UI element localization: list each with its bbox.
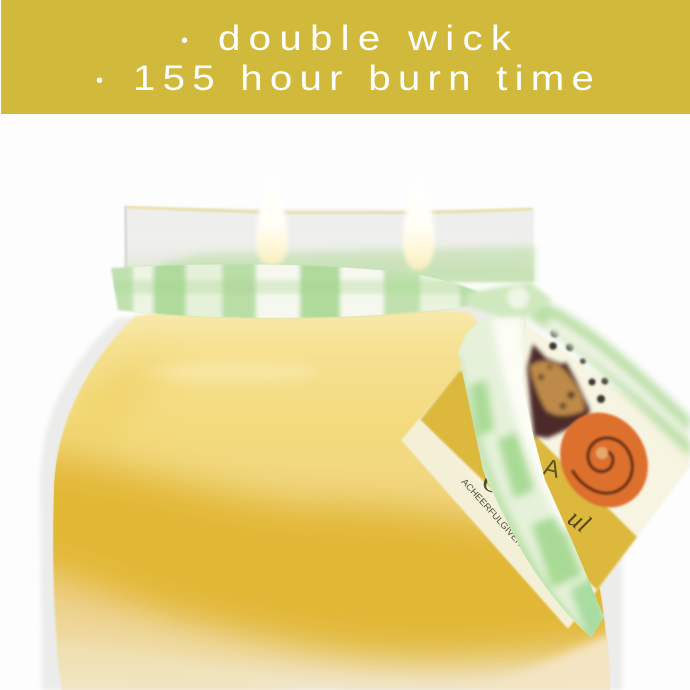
muffin illustration: [527, 344, 590, 438]
jar neck glass: [124, 208, 534, 282]
gingham ribbon: [110, 264, 552, 319]
banner: [1, 0, 690, 114]
jar rim line: [125, 207, 533, 213]
pale highlight band: [140, 362, 320, 382]
dark mustard band: [20, 452, 640, 658]
tag mustard panel: [420, 370, 637, 590]
tag cream strip: [402, 420, 590, 628]
neck right edge: [532, 209, 534, 268]
flame right: [403, 174, 435, 270]
neck left edge: [125, 206, 127, 268]
pale bottom wash: [58, 644, 280, 690]
tag green ribbon right tail: [528, 298, 690, 457]
jar glass body: [40, 300, 622, 690]
banner line two: 155 hour burn time: [133, 58, 601, 97]
banner line one: double wick: [218, 18, 519, 57]
wax tones: [20, 355, 640, 690]
tag script letters: ul: [563, 503, 596, 539]
flame left: [256, 176, 288, 266]
ribbon base: [111, 264, 478, 318]
tag script letters: [478, 454, 596, 539]
tag script letters: A: [540, 454, 563, 484]
banner bullet two: •: [96, 70, 103, 92]
cinnamon roll illustration: [543, 397, 665, 523]
hang tag: [402, 295, 690, 645]
tag card: [402, 305, 690, 628]
banner bullet one: •: [181, 30, 188, 52]
ribbon checks: [133, 258, 153, 324]
tag script letters: G: [478, 464, 510, 502]
candle wax: [53, 306, 610, 690]
tag green ribbon long tie: [458, 314, 604, 637]
banner background: [1, 0, 690, 114]
warm left shoulder: [62, 351, 170, 439]
ribbon knot: [466, 282, 552, 316]
pale bottom right wash: [488, 629, 610, 690]
tag url text: ACHEERFULGIVER.COM: [460, 477, 542, 567]
ribbon reflection in neck: [160, 246, 535, 282]
chocolate chips: [549, 328, 608, 403]
candle jar: [40, 206, 622, 690]
